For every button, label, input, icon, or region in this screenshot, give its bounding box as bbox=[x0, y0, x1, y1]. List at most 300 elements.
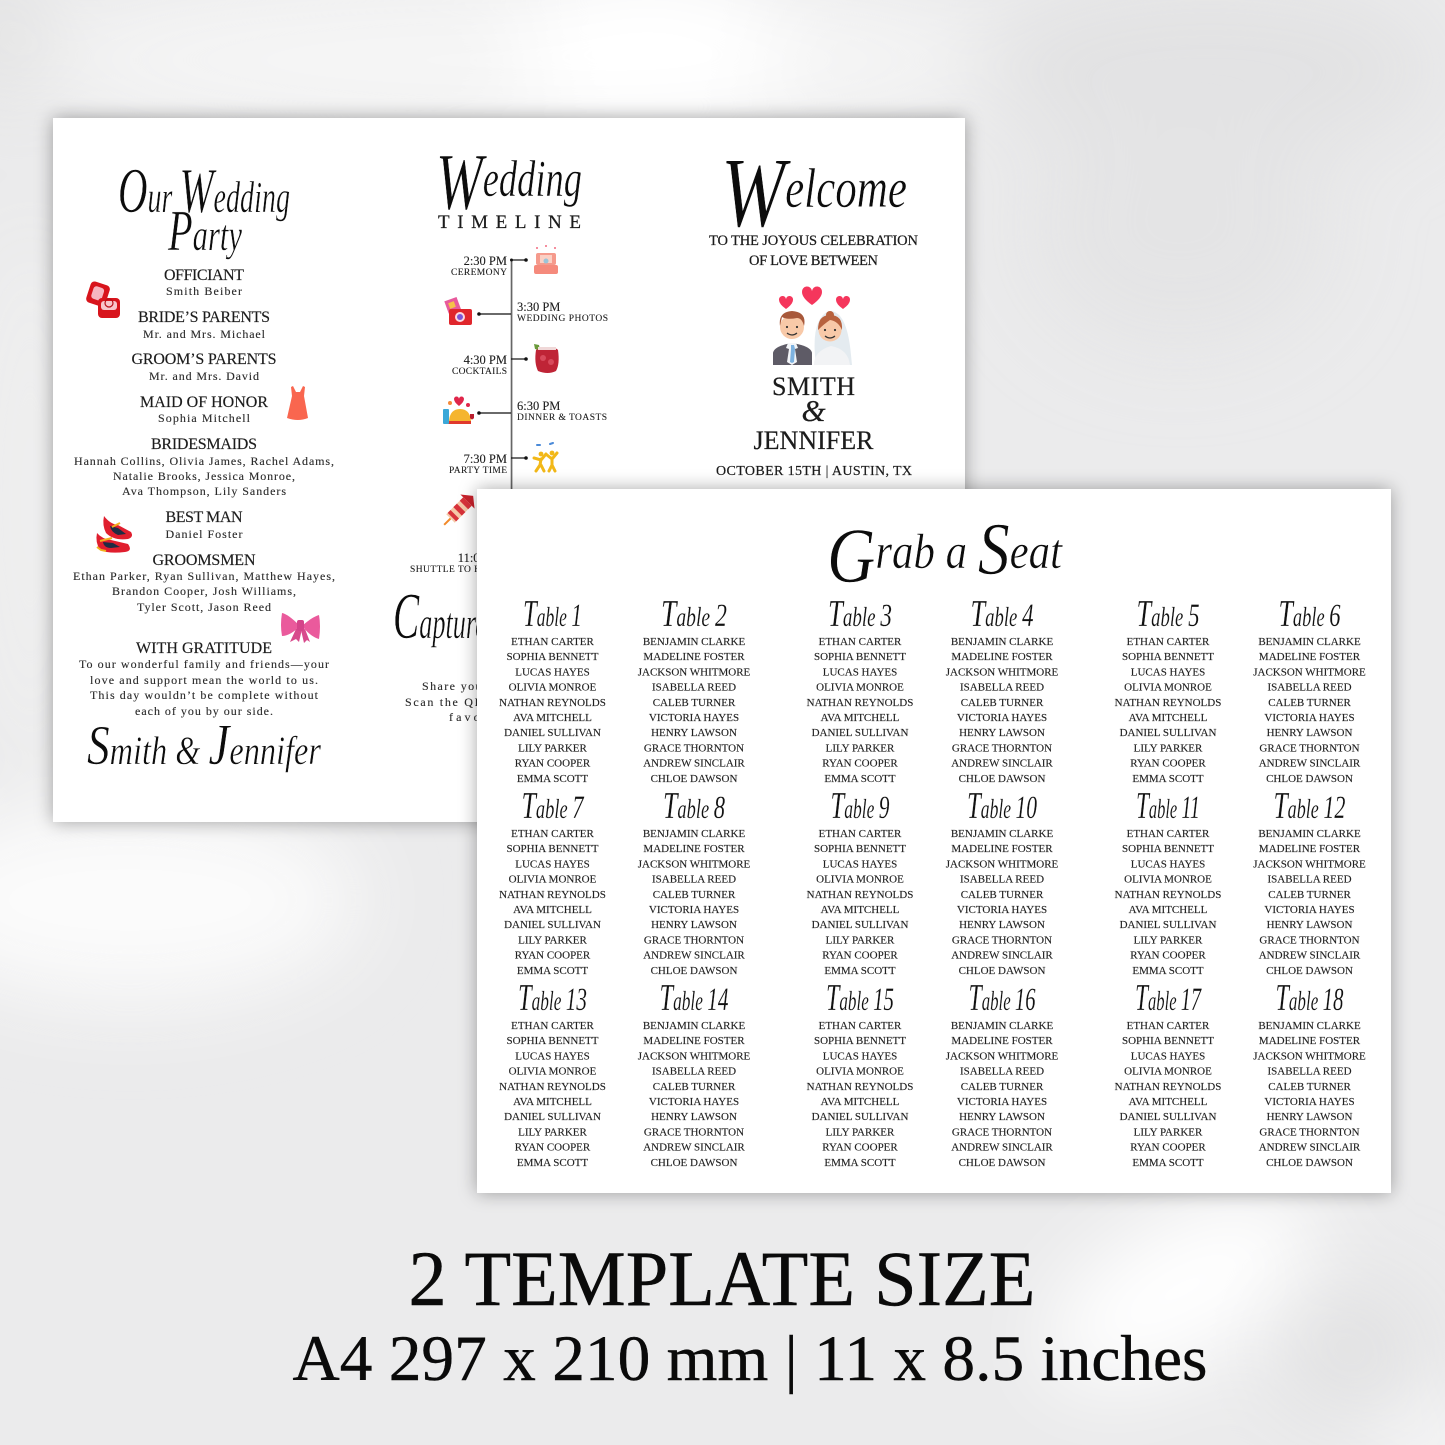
table 5: LILY PARKER bbox=[1134, 742, 1203, 754]
table 13 bbox=[499, 977, 606, 1169]
timeline item: ceremony: 2:30 PM bbox=[464, 254, 507, 268]
table 3: DANIEL SULLIVAN bbox=[812, 727, 908, 739]
icon: red cocktail bbox=[534, 344, 559, 373]
table 3: LILY PARKER bbox=[826, 742, 895, 754]
gratitude message bbox=[79, 640, 329, 718]
icon: camera with photo bbox=[444, 297, 472, 325]
table 15: OLIVIA MONROE bbox=[816, 1066, 904, 1078]
table 15: NATHAN REYNOLDS bbox=[807, 1081, 913, 1093]
table 2: CHLOE DAWSON bbox=[651, 773, 737, 785]
table 2 bbox=[638, 593, 751, 785]
table 17: LILY PARKER bbox=[1134, 1126, 1203, 1138]
table 3: AVA MITCHELL bbox=[821, 712, 900, 724]
table 13: SOPHIA BENNETT bbox=[507, 1035, 599, 1047]
table 9 bbox=[807, 785, 913, 977]
table 8: HENRY LAWSON bbox=[651, 919, 737, 931]
wedding party list: Brandon Cooper, Josh Williams, bbox=[112, 584, 296, 598]
table 16: CHLOE DAWSON bbox=[959, 1157, 1045, 1169]
table 10: BENJAMIN CLARKE bbox=[951, 828, 1053, 840]
timeline item: dinner and toasts: 6:30 PM bbox=[517, 399, 560, 413]
table 12: CALEB TURNER bbox=[1268, 889, 1351, 901]
table 3: RYAN COOPER bbox=[822, 758, 898, 770]
wedding party list: Smith Beiber bbox=[166, 284, 242, 298]
table 8 bbox=[638, 785, 751, 977]
table 14: BENJAMIN CLARKE bbox=[643, 1020, 745, 1032]
table 14: MADELINE FOSTER bbox=[643, 1035, 745, 1047]
wedding party list: Ava Thompson, Lily Sanders bbox=[122, 484, 286, 498]
table 4: JACKSON WHITMORE bbox=[946, 666, 1059, 678]
table 13: ETHAN CARTER bbox=[511, 1020, 595, 1032]
table 17: LUCAS HAYES bbox=[1131, 1050, 1205, 1062]
table 13: OLIVIA MONROE bbox=[509, 1066, 597, 1078]
table 12: ISABELLA REED bbox=[1267, 874, 1352, 886]
table 4: HENRY LAWSON bbox=[959, 727, 1045, 739]
table 5: RYAN COOPER bbox=[1130, 758, 1206, 770]
table 16: ANDREW SINCLAIR bbox=[951, 1142, 1053, 1154]
icon: pink bow bbox=[281, 613, 320, 643]
table 12: VICTORIA HAYES bbox=[1264, 904, 1355, 916]
table 12: GRACE THORNTON bbox=[1259, 934, 1360, 946]
table 6: MADELINE FOSTER bbox=[1259, 651, 1361, 663]
table 7 bbox=[499, 785, 606, 977]
table 5: EMMA SCOTT bbox=[1132, 773, 1204, 785]
table 3: Table 3 bbox=[828, 593, 892, 635]
table 9: OLIVIA MONROE bbox=[816, 874, 904, 886]
table 15: Table 15 bbox=[826, 977, 894, 1019]
icon: engagement ring box bbox=[534, 245, 558, 274]
table 18: JACKSON WHITMORE bbox=[1253, 1050, 1366, 1062]
table 7: DANIEL SULLIVAN bbox=[504, 919, 601, 931]
table 3: LUCAS HAYES bbox=[823, 666, 897, 678]
table 6: HENRY LAWSON bbox=[1267, 727, 1352, 739]
couple names: SMITH bbox=[772, 372, 855, 401]
table 15: DANIEL SULLIVAN bbox=[812, 1111, 908, 1123]
table 7: NATHAN REYNOLDS bbox=[499, 889, 606, 901]
welcome subtitle bbox=[709, 233, 919, 269]
wedding party list: Mr. and Mrs. David bbox=[149, 369, 259, 383]
table 1: DANIEL SULLIVAN bbox=[504, 727, 601, 739]
table 13: AVA MITCHELL bbox=[513, 1096, 592, 1108]
table 4: MADELINE FOSTER bbox=[951, 651, 1053, 663]
timeline item: ceremony: CEREMONY bbox=[451, 268, 507, 278]
icon: dancing people bbox=[534, 443, 557, 471]
table 7: Table 7 bbox=[522, 785, 585, 827]
table 6: JACKSON WHITMORE bbox=[1253, 666, 1366, 678]
table 11: RYAN COOPER bbox=[1130, 950, 1206, 962]
table 14: VICTORIA HAYES bbox=[649, 1096, 739, 1108]
table 1: OLIVIA MONROE bbox=[509, 682, 597, 694]
table 10: Table 10 bbox=[967, 785, 1037, 827]
table 17: EMMA SCOTT bbox=[1132, 1157, 1204, 1169]
table 5: LUCAS HAYES bbox=[1131, 666, 1205, 678]
date and place: OCTOBER 15TH | AUSTIN, TX bbox=[716, 464, 912, 479]
table 12 bbox=[1253, 785, 1366, 977]
wedding party list: MAID OF HONOR bbox=[140, 394, 268, 411]
table 15: AVA MITCHELL bbox=[821, 1096, 900, 1108]
timeline item: shuttle: SHUTTLE TO HOTEL bbox=[410, 565, 507, 575]
table 18: ISABELLA REED bbox=[1267, 1066, 1352, 1078]
table 1: SOPHIA BENNETT bbox=[507, 651, 599, 663]
heading: Capture the moments: Capture the Moments bbox=[393, 580, 628, 653]
table 15: LILY PARKER bbox=[826, 1126, 895, 1138]
table 6: GRACE THORNTON bbox=[1259, 742, 1360, 754]
heading: Our Wedding Party: Party bbox=[167, 198, 242, 263]
heading: Grab a Seat: eat bbox=[1010, 523, 1063, 579]
table 16: HENRY LAWSON bbox=[959, 1111, 1045, 1123]
table 16: Table 16 bbox=[968, 977, 1036, 1019]
table 18: CHLOE DAWSON bbox=[1266, 1157, 1353, 1169]
table 10: VICTORIA HAYES bbox=[957, 904, 1047, 916]
timeline item: shuttle: 11:00 PM bbox=[458, 551, 507, 565]
table 10: CHLOE DAWSON bbox=[959, 965, 1045, 977]
table 11: ETHAN CARTER bbox=[1127, 828, 1210, 840]
table 5: AVA MITCHELL bbox=[1129, 712, 1208, 724]
table 14: ANDREW SINCLAIR bbox=[643, 1142, 745, 1154]
couple names bbox=[754, 372, 874, 455]
table 5: DANIEL SULLIVAN bbox=[1120, 727, 1216, 739]
heading: Wedding Timeline bbox=[436, 139, 582, 233]
wedding party list: Tyler Scott, Jason Reed bbox=[137, 600, 271, 614]
table 2: JACKSON WHITMORE bbox=[638, 666, 751, 678]
table 3 bbox=[807, 593, 913, 785]
table 7: ETHAN CARTER bbox=[511, 828, 595, 840]
table 14: GRACE THORNTON bbox=[644, 1126, 744, 1138]
couple names: & bbox=[801, 393, 826, 428]
table 5: OLIVIA MONROE bbox=[1124, 682, 1212, 694]
table 13: RYAN COOPER bbox=[515, 1142, 591, 1154]
table 18: BENJAMIN CLARKE bbox=[1258, 1020, 1361, 1032]
timeline item: party time: PARTY TIME bbox=[449, 466, 507, 476]
heading: Welcome: elcome bbox=[785, 158, 907, 220]
icon: firework rocket bbox=[437, 489, 480, 532]
table 7: AVA MITCHELL bbox=[513, 904, 592, 916]
table 7: LILY PARKER bbox=[518, 934, 587, 946]
wedding party list: Sophia Mitchell bbox=[158, 411, 251, 425]
table 6: VICTORIA HAYES bbox=[1264, 712, 1355, 724]
table 17: OLIVIA MONROE bbox=[1124, 1066, 1212, 1078]
table 9: EMMA SCOTT bbox=[824, 965, 896, 977]
table 8: VICTORIA HAYES bbox=[649, 904, 739, 916]
photo sharing note: Scan the QR code to upload your bbox=[405, 695, 615, 709]
heading: Grab a Seat: G bbox=[827, 512, 875, 599]
table 18 bbox=[1253, 977, 1366, 1169]
timeline item: dinner and toasts bbox=[477, 399, 607, 423]
wedding party list: Hannah Collins, Olivia James, Rachel Adams, bbox=[74, 454, 334, 468]
table 9: AVA MITCHELL bbox=[821, 904, 900, 916]
table 18: Table 18 bbox=[1276, 977, 1344, 1019]
table 16: CALEB TURNER bbox=[961, 1081, 1044, 1093]
timeline item: cocktails: 4:30 PM bbox=[464, 353, 507, 367]
table 8: GRACE THORNTON bbox=[644, 934, 744, 946]
table 14: CALEB TURNER bbox=[653, 1081, 736, 1093]
timeline item: ceremony bbox=[451, 254, 528, 278]
table 6: Table 6 bbox=[1278, 593, 1341, 635]
table 16: MADELINE FOSTER bbox=[951, 1035, 1053, 1047]
wedding party list: OFFICIANT bbox=[164, 267, 244, 284]
table 11: DANIEL SULLIVAN bbox=[1120, 919, 1216, 931]
heading: Our Wedding Party bbox=[118, 155, 290, 263]
table 3: EMMA SCOTT bbox=[824, 773, 896, 785]
heading: Wedding Timeline: edding bbox=[483, 151, 582, 208]
wedding party list: Mr. and Mrs. Michael bbox=[143, 327, 266, 341]
table 12: JACKSON WHITMORE bbox=[1253, 858, 1366, 870]
wedding party list: Ethan Parker, Ryan Sullivan, Matthew Hayes, bbox=[73, 569, 335, 583]
timeline spine bbox=[511, 260, 512, 500]
table 6: ISABELLA REED bbox=[1267, 682, 1352, 694]
table 11: EMMA SCOTT bbox=[1132, 965, 1204, 977]
timeline item: wedding photos: WEDDING PHOTOS bbox=[517, 314, 608, 324]
table 17: ETHAN CARTER bbox=[1127, 1020, 1210, 1032]
table 2: BENJAMIN CLARKE bbox=[643, 636, 745, 648]
table 9: RYAN COOPER bbox=[822, 950, 898, 962]
table 6: CHLOE DAWSON bbox=[1266, 773, 1353, 785]
table 8: BENJAMIN CLARKE bbox=[643, 828, 745, 840]
couple names: JENNIFER bbox=[754, 426, 874, 455]
table 17: SOPHIA BENNETT bbox=[1122, 1035, 1214, 1047]
table 16: BENJAMIN CLARKE bbox=[951, 1020, 1053, 1032]
table 11 bbox=[1115, 785, 1221, 977]
wedding party list: GROOM’S PARENTS bbox=[132, 351, 276, 368]
table 9: LUCAS HAYES bbox=[823, 858, 897, 870]
table 1: Table 1 bbox=[523, 593, 582, 635]
timeline item: wedding photos bbox=[477, 300, 608, 324]
table 7: EMMA SCOTT bbox=[517, 965, 588, 977]
icon: dinner cloche with hearts bbox=[443, 396, 474, 424]
heading: Our Wedding Party: Our Wedding bbox=[118, 155, 290, 226]
table 1: EMMA SCOTT bbox=[517, 773, 588, 785]
table 1: NATHAN REYNOLDS bbox=[499, 697, 606, 709]
gratitude message: each of you by our side. bbox=[135, 704, 273, 718]
table 11: LUCAS HAYES bbox=[1131, 858, 1205, 870]
photo sharing note: Share your special moments! bbox=[422, 679, 598, 693]
table 12: Table 12 bbox=[1274, 785, 1346, 827]
table 1 bbox=[499, 593, 606, 785]
table 8: MADELINE FOSTER bbox=[643, 843, 745, 855]
table 3: NATHAN REYNOLDS bbox=[807, 697, 913, 709]
table 11: SOPHIA BENNETT bbox=[1122, 843, 1214, 855]
table 12: HENRY LAWSON bbox=[1267, 919, 1352, 931]
table 8: ISABELLA REED bbox=[652, 874, 736, 886]
table 12: BENJAMIN CLARKE bbox=[1258, 828, 1361, 840]
table 15: SOPHIA BENNETT bbox=[814, 1035, 906, 1047]
table 14: Table 14 bbox=[660, 977, 728, 1019]
welcome subtitle: TO THE JOYOUS CELEBRATION bbox=[709, 233, 919, 249]
table 5: SOPHIA BENNETT bbox=[1122, 651, 1214, 663]
table 9: DANIEL SULLIVAN bbox=[812, 919, 908, 931]
table 8: Table 8 bbox=[663, 785, 725, 827]
table 14: ISABELLA REED bbox=[652, 1066, 736, 1078]
wedding party list: BEST MAN bbox=[166, 509, 243, 526]
icon: couple with hearts bbox=[773, 286, 852, 365]
table 14 bbox=[638, 977, 751, 1169]
table 2: ISABELLA REED bbox=[652, 682, 736, 694]
table 5: ETHAN CARTER bbox=[1127, 636, 1210, 648]
heading: Wedding Timeline: W bbox=[436, 139, 487, 227]
table 15: EMMA SCOTT bbox=[824, 1157, 896, 1169]
table 15: LUCAS HAYES bbox=[823, 1050, 897, 1062]
timeline item: cocktails bbox=[452, 353, 528, 377]
heading: Welcome: W bbox=[721, 137, 791, 248]
wedding party list bbox=[73, 267, 335, 614]
table 1: LUCAS HAYES bbox=[515, 666, 590, 678]
table 15 bbox=[807, 977, 913, 1169]
gratitude message: WITH GRATITUDE bbox=[136, 640, 272, 657]
table 5: Table 5 bbox=[1136, 593, 1200, 635]
table 10 bbox=[946, 785, 1059, 977]
table 1: AVA MITCHELL bbox=[513, 712, 592, 724]
table 7: SOPHIA BENNETT bbox=[507, 843, 599, 855]
table 13: NATHAN REYNOLDS bbox=[499, 1081, 606, 1093]
welcome subtitle: OF LOVE BETWEEN bbox=[749, 253, 879, 269]
table 10: MADELINE FOSTER bbox=[951, 843, 1053, 855]
table 2: Table 2 bbox=[661, 593, 727, 635]
table 14: HENRY LAWSON bbox=[651, 1111, 737, 1123]
table 3: OLIVIA MONROE bbox=[816, 682, 904, 694]
heading: Wedding Timeline: TIMELINE bbox=[438, 212, 581, 233]
table 17 bbox=[1115, 977, 1221, 1169]
table 17: Table 17 bbox=[1135, 977, 1202, 1019]
table 11: NATHAN REYNOLDS bbox=[1115, 889, 1221, 901]
table 9: ETHAN CARTER bbox=[819, 828, 902, 840]
table 6: CALEB TURNER bbox=[1268, 697, 1351, 709]
table 4: ISABELLA REED bbox=[960, 682, 1044, 694]
gratitude message: To our wonderful family and friends—your bbox=[79, 657, 329, 671]
table 11: Table 11 bbox=[1136, 785, 1200, 827]
table 11: OLIVIA MONROE bbox=[1124, 874, 1212, 886]
table 3: ETHAN CARTER bbox=[819, 636, 902, 648]
signature: Smith & Jennifer bbox=[87, 712, 321, 777]
table 2: VICTORIA HAYES bbox=[649, 712, 739, 724]
icon: coral dress bbox=[287, 386, 308, 420]
gratitude message: This day wouldn’t be complete without bbox=[90, 688, 319, 702]
gratitude message: love and support mean the world to us. bbox=[90, 673, 318, 687]
table 6: ANDREW SINCLAIR bbox=[1259, 758, 1361, 770]
table 11: AVA MITCHELL bbox=[1129, 904, 1208, 916]
table 6 bbox=[1253, 593, 1366, 785]
table 15: ETHAN CARTER bbox=[819, 1020, 902, 1032]
table 13: DANIEL SULLIVAN bbox=[504, 1111, 601, 1123]
table 16: GRACE THORNTON bbox=[952, 1126, 1052, 1138]
table 18: VICTORIA HAYES bbox=[1264, 1096, 1355, 1108]
table 14: CHLOE DAWSON bbox=[651, 1157, 737, 1169]
panel: seating chart sheet bbox=[477, 489, 1391, 1193]
table 10: JACKSON WHITMORE bbox=[946, 858, 1059, 870]
table 10: ANDREW SINCLAIR bbox=[951, 950, 1053, 962]
table 2: HENRY LAWSON bbox=[651, 727, 737, 739]
table 10: GRACE THORNTON bbox=[952, 934, 1052, 946]
table 1: LILY PARKER bbox=[518, 742, 587, 754]
wedding party list: BRIDE’S PARENTS bbox=[138, 309, 270, 326]
heading: Grab a Seat: rab a bbox=[875, 523, 978, 579]
table 4: GRACE THORNTON bbox=[952, 742, 1052, 754]
timeline item: party time: 7:30 PM bbox=[464, 452, 507, 466]
table 16: JACKSON WHITMORE bbox=[946, 1050, 1059, 1062]
table 13: Table 13 bbox=[518, 977, 587, 1019]
table 17: RYAN COOPER bbox=[1130, 1142, 1206, 1154]
table 16: VICTORIA HAYES bbox=[957, 1096, 1047, 1108]
table 2: GRACE THORNTON bbox=[644, 742, 744, 754]
table 1: RYAN COOPER bbox=[515, 758, 591, 770]
table 7: RYAN COOPER bbox=[515, 950, 591, 962]
table 18: ANDREW SINCLAIR bbox=[1259, 1142, 1361, 1154]
caption: template size: 2 TEMPLATE SIZE bbox=[408, 1235, 1036, 1322]
table 3: SOPHIA BENNETT bbox=[814, 651, 906, 663]
wedding party list: Daniel Foster bbox=[166, 527, 242, 541]
wedding party list: GROOMSMEN bbox=[152, 552, 256, 569]
table 17: AVA MITCHELL bbox=[1129, 1096, 1208, 1108]
wedding party list: Natalie Brooks, Jessica Monroe, bbox=[113, 469, 295, 483]
table 13: EMMA SCOTT bbox=[517, 1157, 588, 1169]
icon: red shoes bbox=[96, 516, 132, 553]
photo sharing note: favorite photos. bbox=[449, 710, 571, 724]
table 7: LUCAS HAYES bbox=[515, 858, 590, 870]
table 5 bbox=[1115, 593, 1221, 785]
table 4: BENJAMIN CLARKE bbox=[951, 636, 1053, 648]
heading: Grab a Seat: S bbox=[978, 509, 1010, 591]
table 12: ANDREW SINCLAIR bbox=[1259, 950, 1361, 962]
table 6: BENJAMIN CLARKE bbox=[1258, 636, 1361, 648]
table 10: CALEB TURNER bbox=[961, 889, 1044, 901]
caption: dimensions: A4 297 x 210 mm | 11 x 8.5 inches bbox=[292, 1323, 1208, 1395]
table 4: VICTORIA HAYES bbox=[957, 712, 1047, 724]
table 12: MADELINE FOSTER bbox=[1259, 843, 1361, 855]
table 4: ANDREW SINCLAIR bbox=[951, 758, 1053, 770]
table 8: ANDREW SINCLAIR bbox=[643, 950, 745, 962]
table 10: ISABELLA REED bbox=[960, 874, 1044, 886]
table 18: GRACE THORNTON bbox=[1259, 1126, 1360, 1138]
table 9: Table 9 bbox=[830, 785, 890, 827]
table 9: SOPHIA BENNETT bbox=[814, 843, 906, 855]
icon: ring boxes bbox=[85, 280, 120, 318]
table 4: CHLOE DAWSON bbox=[959, 773, 1045, 785]
table 12: CHLOE DAWSON bbox=[1266, 965, 1353, 977]
table 9: LILY PARKER bbox=[826, 934, 895, 946]
table 8: CALEB TURNER bbox=[653, 889, 736, 901]
table 2: CALEB TURNER bbox=[653, 697, 736, 709]
table 16 bbox=[946, 977, 1059, 1169]
table 8: CHLOE DAWSON bbox=[651, 965, 737, 977]
photo sharing note bbox=[405, 679, 615, 724]
table 14: JACKSON WHITMORE bbox=[638, 1050, 751, 1062]
table 4: Table 4 bbox=[970, 593, 1034, 635]
table 5: NATHAN REYNOLDS bbox=[1115, 697, 1221, 709]
table 13: LILY PARKER bbox=[518, 1126, 587, 1138]
table 7: OLIVIA MONROE bbox=[509, 874, 597, 886]
table 13: LUCAS HAYES bbox=[515, 1050, 590, 1062]
timeline item: shuttle bbox=[410, 551, 507, 575]
table 9: NATHAN REYNOLDS bbox=[807, 889, 913, 901]
table 16: ISABELLA REED bbox=[960, 1066, 1044, 1078]
panel: wedding program sheet bbox=[53, 118, 965, 822]
timeline item: wedding photos: 3:30 PM bbox=[517, 300, 560, 314]
table 11: LILY PARKER bbox=[1134, 934, 1203, 946]
table 17: DANIEL SULLIVAN bbox=[1120, 1111, 1216, 1123]
table 8: JACKSON WHITMORE bbox=[638, 858, 751, 870]
timeline item: dinner and toasts: DINNER & TOASTS bbox=[517, 413, 607, 423]
wedding party list: BRIDESMAIDS bbox=[151, 436, 257, 453]
table 4 bbox=[946, 593, 1059, 785]
timeline item: cocktails: COCKTAILS bbox=[452, 367, 507, 377]
table 18: CALEB TURNER bbox=[1268, 1081, 1351, 1093]
table 2: ANDREW SINCLAIR bbox=[643, 758, 745, 770]
table 18: HENRY LAWSON bbox=[1267, 1111, 1352, 1123]
table 17: NATHAN REYNOLDS bbox=[1115, 1081, 1221, 1093]
timeline item: party time bbox=[449, 452, 528, 476]
table 1: ETHAN CARTER bbox=[511, 636, 595, 648]
table 18: MADELINE FOSTER bbox=[1259, 1035, 1361, 1047]
table 4: CALEB TURNER bbox=[961, 697, 1044, 709]
table 2: MADELINE FOSTER bbox=[643, 651, 745, 663]
